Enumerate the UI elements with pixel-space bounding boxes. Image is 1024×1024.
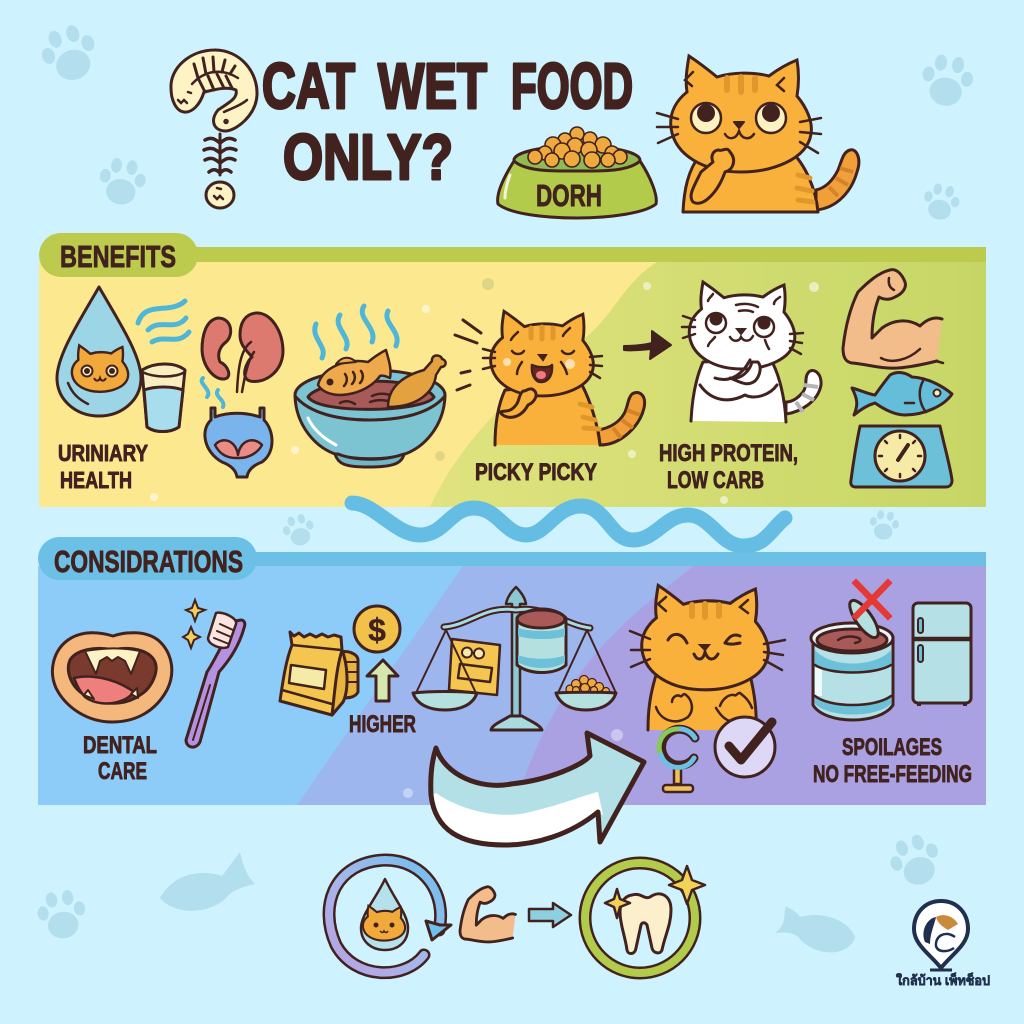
icon: cat mouth with teeth xyxy=(52,633,172,722)
title: ONLY? xyxy=(283,121,453,193)
considerations purple tone xyxy=(515,566,986,805)
title: CAT xyxy=(262,50,355,122)
considerations tab: CONSIDRATIONS xyxy=(54,544,243,579)
icon: water drop with cat xyxy=(57,287,141,416)
icon: happy picky cat xyxy=(483,311,645,445)
icon: steam xyxy=(315,306,397,358)
panel: benefits xyxy=(39,233,986,507)
icon: food bag and coins xyxy=(280,632,358,715)
icon: thinking orange cat xyxy=(657,56,859,212)
title xyxy=(262,50,633,193)
icon: blue fish xyxy=(852,373,952,415)
label: high protein, low carb: LOW CARB xyxy=(667,467,764,494)
icon: small flexed arm xyxy=(460,887,515,942)
label: picky picky: PICKY PICKY xyxy=(475,459,597,486)
icon: white cat with crossed arms xyxy=(682,282,821,422)
icon: food bowl labelled DORH xyxy=(498,127,656,218)
icon: open wet food can with red cross xyxy=(811,596,893,720)
icon: toothbrush xyxy=(183,600,245,747)
icon: balance scale with bag and can xyxy=(413,587,616,730)
icon: fridge xyxy=(913,603,971,706)
label: spoilages no free-feeding: SPOILAGES xyxy=(842,734,942,761)
label: spoilages no free-feeding xyxy=(813,734,972,788)
title: WET xyxy=(378,50,487,122)
icon: kidneys xyxy=(202,313,283,392)
considerations background xyxy=(38,566,986,805)
icon: bladder xyxy=(202,378,272,477)
bowl label: DORH xyxy=(536,178,602,213)
arrow: price up xyxy=(367,660,398,701)
arrow: wavy water line xyxy=(352,503,785,546)
small dots xyxy=(150,278,819,504)
label: high protein, low carb: HIGH PROTEIN, xyxy=(659,440,798,467)
arrow: to tooth xyxy=(529,903,571,927)
benefits panel background xyxy=(39,262,986,507)
title: FOOD xyxy=(511,50,633,122)
label: high protein, low carb xyxy=(659,440,798,494)
icon: weighing scale xyxy=(851,426,952,487)
icon: ring toy xyxy=(659,729,695,792)
label: urinary health: HEALTH xyxy=(60,467,132,493)
arrow: to white cat xyxy=(624,331,671,359)
icon: check mark xyxy=(715,717,775,777)
considerations band xyxy=(240,552,986,566)
icon: red cross xyxy=(856,583,888,616)
icon: bowl of wet food with fish and chicken xyxy=(295,350,446,467)
considerations mid tone xyxy=(297,566,986,805)
label: dental care xyxy=(83,732,157,785)
label: dental care: CARE xyxy=(98,758,147,785)
icon: smiling orange cat xyxy=(630,585,785,730)
icon: question mark made of fish bones xyxy=(171,50,257,208)
icon: glass of water xyxy=(142,364,185,432)
icon: flexed arm xyxy=(843,270,943,368)
icon: water waves xyxy=(138,301,189,342)
label: urinary health: URINIARY xyxy=(58,440,148,466)
considerations tab xyxy=(38,537,257,580)
small dots xyxy=(403,729,623,798)
benefits tab: BENEFITS xyxy=(60,239,176,274)
panel: considerations xyxy=(38,537,986,845)
icon: green ring with clean tooth xyxy=(585,863,705,973)
label: dental care: DENTAL xyxy=(83,732,157,759)
benefits green area xyxy=(430,262,986,507)
logo: pet shop pin xyxy=(896,901,990,988)
label: urinary health xyxy=(58,440,148,493)
label: higher: HIGHER xyxy=(349,711,416,738)
icon: circular arrow with water drop and cat xyxy=(329,860,451,973)
icon: dollar coin xyxy=(354,606,400,652)
arrow: big curved arrow xyxy=(431,733,644,845)
icon: dollar coin: $ xyxy=(368,612,386,648)
logo wordmark: ใกล้บ้าน เพ็ทช็อป xyxy=(896,971,990,988)
benefits top band xyxy=(190,247,986,262)
benefits tab xyxy=(39,233,198,277)
icon: motion lines xyxy=(455,320,481,390)
